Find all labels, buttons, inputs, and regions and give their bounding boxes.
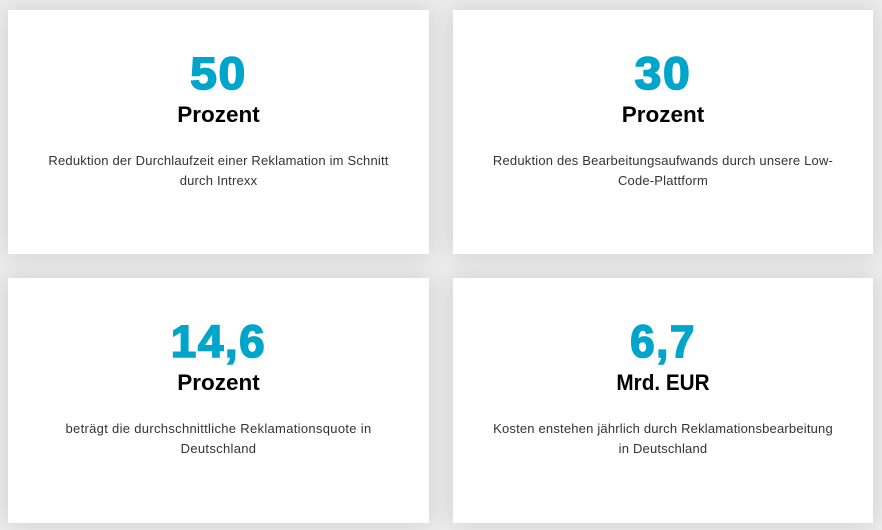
description text: [48, 153, 389, 188]
unit heading: Mrd. EUR: Mrd. EUR: [616, 370, 710, 395]
panel: 6,7 Mrd. EUR: [453, 278, 873, 523]
statistic number: 14,6: 14,6: [171, 316, 266, 367]
description text: [493, 153, 833, 188]
unit heading: Prozent: Prozent: [622, 102, 704, 127]
panel: 50 Prozent: [8, 10, 429, 254]
unit heading: Prozent: Prozent: [177, 102, 260, 127]
description text: [493, 421, 833, 456]
description text: Reduktion des Bearbeitungsaufwands durch unsere Low-: [493, 153, 833, 168]
panel: 14,6 Prozent: [8, 278, 429, 523]
description text: Kosten enstehen jährlich durch Reklamationsbearbeitung: [493, 421, 833, 436]
description text: Deutschland: [181, 441, 256, 456]
statistic number: 6,7: 6,7: [630, 316, 696, 367]
description text: Code-Plattform: [618, 173, 708, 188]
statistic number: 50: 50: [190, 48, 247, 99]
description text: beträgt die durchschnittliche Reklamationsquote in: [65, 421, 372, 436]
description text: Reduktion der Durchlaufzeit einer Reklamation im Schnitt: [48, 153, 389, 168]
statistic number: 30: 30: [635, 48, 691, 99]
description text: [65, 421, 372, 456]
panel: 30 Prozent: [453, 10, 873, 254]
description text: in Deutschland: [619, 441, 707, 456]
unit heading: Prozent: Prozent: [177, 370, 260, 395]
description text: durch Intrexx: [180, 173, 257, 188]
